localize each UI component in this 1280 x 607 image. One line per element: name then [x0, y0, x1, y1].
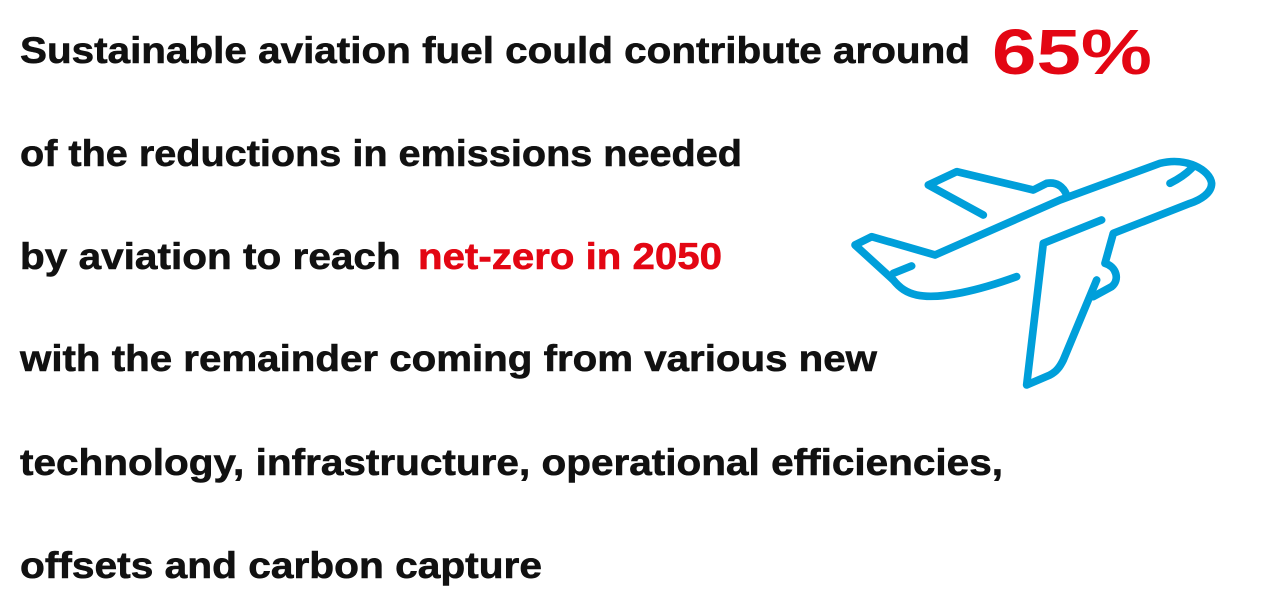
line 3: by aviation to reach: [20, 236, 412, 277]
icon: airplane: [855, 162, 1212, 385]
line 3: net-zero in 2050: [418, 236, 722, 277]
line 4: with the remainder coming from various new: [19, 338, 877, 379]
line 2: of the reductions in emissions needed: [20, 133, 742, 174]
stat: 65%: 65%: [992, 16, 1152, 88]
line 1: [20, 16, 1152, 88]
line 6: offsets and carbon capture: [20, 545, 542, 586]
line 1: Sustainable aviation fuel could contribute around: [20, 30, 970, 71]
line 5: technology, infrastructure, operational efficiencies,: [20, 442, 1003, 483]
